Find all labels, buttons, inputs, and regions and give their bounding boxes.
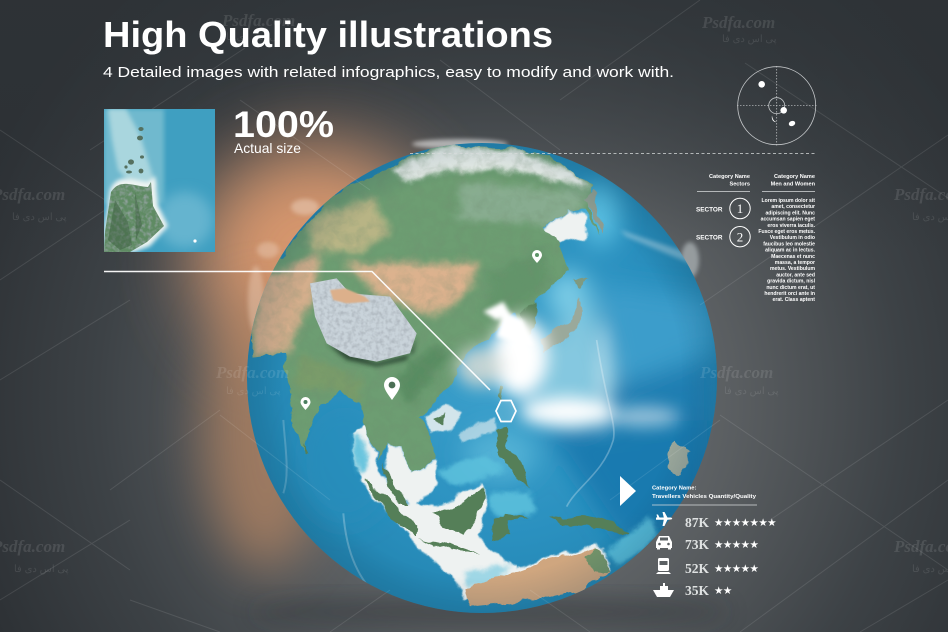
sector 1 row: 1 xyxy=(737,201,743,216)
ocean xyxy=(240,140,720,620)
text column: amet, consectetur xyxy=(771,204,815,210)
watermark text: پی اس دی فا xyxy=(724,386,779,397)
sector table: Sectors xyxy=(729,182,750,188)
tibetan plateau xyxy=(310,278,418,369)
ocean tonal areas xyxy=(460,176,714,540)
text column: nunc dictum erat, ut xyxy=(766,285,815,291)
watermark text: پی اس دی فا xyxy=(14,564,69,575)
transport legend: Category Name: xyxy=(652,486,697,492)
text column: accumsan sapien eget xyxy=(761,217,815,223)
actual size label: Actual size xyxy=(234,140,301,156)
text column: Lorem ipsum dolor sit xyxy=(762,198,815,204)
text column: auctor, ante sed xyxy=(776,272,815,278)
watermark text: پی اس دی فا xyxy=(722,34,777,45)
row: car xyxy=(656,536,758,552)
row: car: ★★★★★ xyxy=(714,539,758,551)
dashed separator xyxy=(410,152,815,154)
map pin: large xyxy=(384,377,400,400)
text column: Category Name xyxy=(774,174,815,180)
sector 1 row xyxy=(696,198,750,219)
text column: erat. Class aptent xyxy=(773,297,815,303)
watermark text: پی اس دی فا xyxy=(12,212,67,223)
text column: gravida dictum, nisl xyxy=(767,279,816,285)
sector 2 row: SECTOR xyxy=(696,234,723,242)
text column: faucibus leo molestie xyxy=(763,241,815,247)
text column xyxy=(758,174,816,303)
row: train: 52K xyxy=(685,561,710,576)
watermark text: Psdfa.com xyxy=(701,13,775,32)
sector table: Category Name xyxy=(709,174,750,180)
text column: hendrerit orci ante in xyxy=(764,291,815,297)
radar chart xyxy=(737,66,817,146)
subtitle: 4 Detailed images with related infographics, easy to modify and work with. xyxy=(103,65,674,81)
inset map image xyxy=(104,109,215,254)
text column: aliquam ac in lectus. xyxy=(765,248,816,254)
sector 1 row: SECTOR xyxy=(696,206,723,214)
globe xyxy=(240,140,720,620)
map pin: india xyxy=(300,397,310,410)
globe limb shading xyxy=(247,143,717,613)
land xyxy=(251,144,600,472)
hexagon marker xyxy=(496,400,516,422)
100% label: 100% xyxy=(233,104,334,145)
row: ship: 35K xyxy=(685,583,710,598)
sector 2 row: 2 xyxy=(737,229,743,244)
text column: adipiscing elit. Nunc xyxy=(765,210,815,216)
watermark text: پی اس دی فا xyxy=(226,386,281,397)
clouds xyxy=(283,230,690,600)
text column: Men and Women xyxy=(771,182,816,188)
land colour regions xyxy=(251,144,593,403)
watermark text: Psdfa.com xyxy=(699,363,773,382)
map pin: north xyxy=(532,250,542,263)
row: ship: ★★ xyxy=(714,585,732,597)
callout line xyxy=(104,272,490,390)
sector table xyxy=(696,174,750,247)
text column: Fusce eget eros metus. xyxy=(758,229,816,235)
orange glow behind globe xyxy=(195,145,435,570)
row: train xyxy=(656,558,758,576)
islands and other land xyxy=(305,190,690,607)
title: High Quality illustrations xyxy=(103,14,553,55)
text column: Maecenas et nunc xyxy=(771,254,815,260)
row: plane: 87K xyxy=(685,515,710,530)
arrow xyxy=(620,476,636,506)
row: plane xyxy=(656,512,776,530)
sector 2 row xyxy=(696,226,750,247)
continental shelves and shallow seas xyxy=(353,212,660,600)
text column: Vestibulum in odio xyxy=(770,235,815,241)
watermark text: پی اس دی فا xyxy=(226,32,281,43)
row: car: 73K xyxy=(685,537,710,552)
transport legend xyxy=(652,486,776,598)
row: plane: ★★★★★★★ xyxy=(714,517,776,529)
transport legend: Travellers Vehicles Quantity/Quality xyxy=(652,494,757,500)
row: ship xyxy=(653,583,732,598)
clouds outside globe edge xyxy=(248,139,699,334)
text column: metus. Vestibulum xyxy=(770,266,815,272)
row: train: ★★★★★ xyxy=(714,563,758,575)
text column: massa, a tempor xyxy=(775,260,815,266)
text column: eros viverra iaculis. xyxy=(767,223,816,229)
watermark text: Psdfa.com xyxy=(215,363,289,382)
watermark text: Psdfa.com xyxy=(221,11,295,30)
